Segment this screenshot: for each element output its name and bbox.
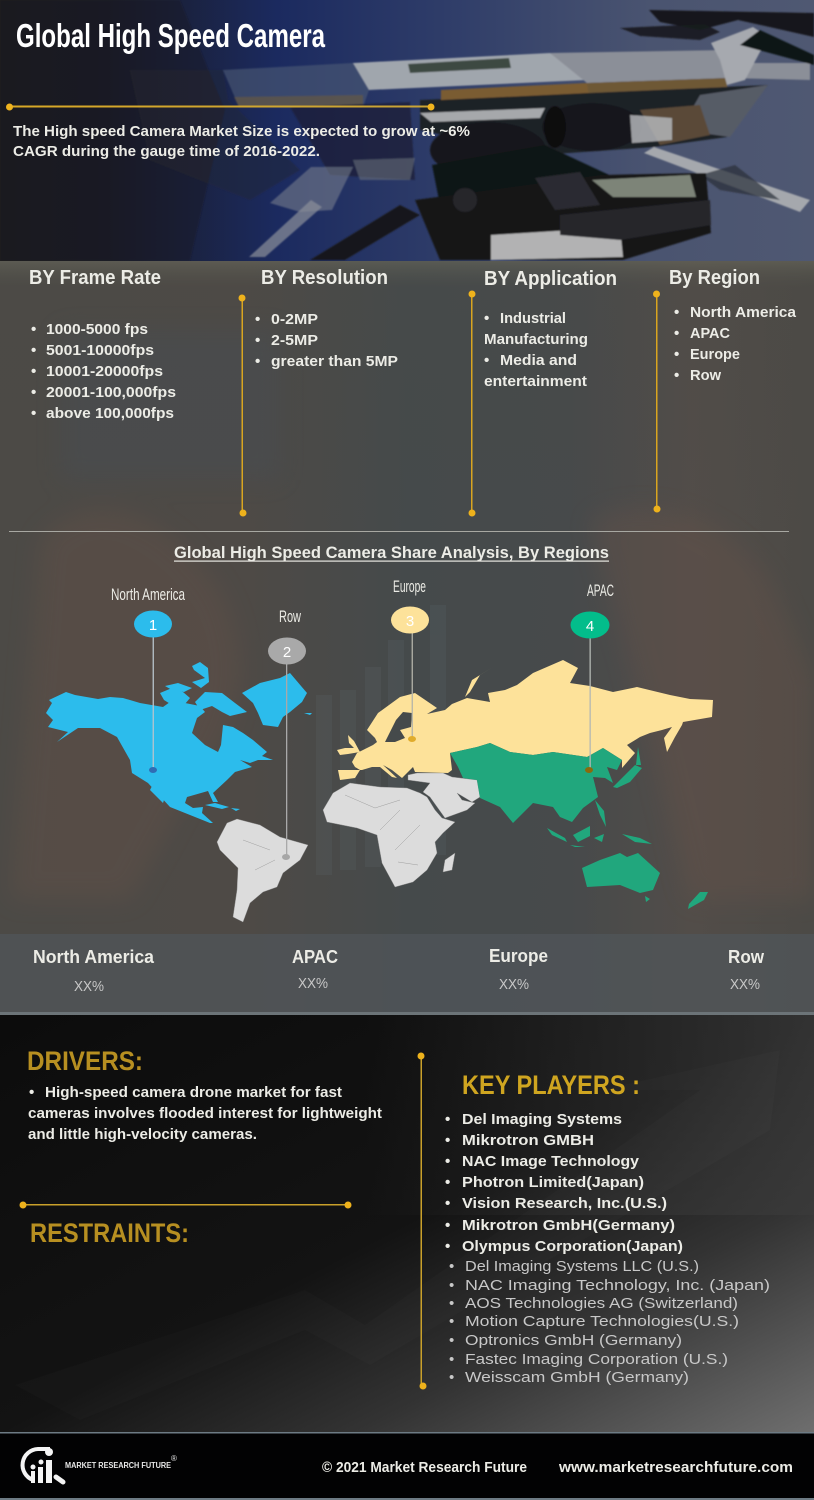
pin: North America bbox=[111, 585, 185, 773]
connector: key players bbox=[418, 1052, 426, 1390]
pin: North America: 1 bbox=[149, 617, 157, 634]
column: frame rate: • bbox=[31, 405, 36, 422]
list: key players: • bbox=[449, 1369, 454, 1386]
stat: Row bbox=[728, 947, 765, 993]
list: key players: • bbox=[445, 1132, 450, 1149]
pin: North America: North America bbox=[111, 585, 185, 604]
heading: drivers: DRIVERS: bbox=[27, 1046, 143, 1076]
column: frame rate: • bbox=[31, 321, 36, 338]
region: Row bbox=[217, 773, 480, 922]
column: frame rate: 5001-10000fps bbox=[46, 342, 154, 359]
text: intro: The High speed Camera Market Size is expected to grow at ~6% bbox=[13, 123, 470, 140]
text: drivers: cameras involves flooded interest for lightweight bbox=[28, 1105, 382, 1122]
column: resolution: greater than 5MP bbox=[271, 353, 398, 370]
list: key players: • bbox=[445, 1238, 450, 1255]
column: frame rate bbox=[29, 267, 176, 422]
divider: drivers and restraints bbox=[20, 1202, 352, 1208]
list: key players bbox=[445, 1111, 770, 1386]
list: key players: Fastec Imaging Corporation (U.S.) bbox=[465, 1351, 728, 1368]
text: website: www.marketresearchfuture.com bbox=[558, 1459, 793, 1476]
heading: key players: KEY PLAYERS : bbox=[462, 1070, 640, 1100]
title: Global High Speed Camera bbox=[16, 17, 325, 54]
connector: resolution bbox=[238, 294, 246, 516]
list: key players: • bbox=[445, 1111, 450, 1128]
column: application bbox=[484, 268, 617, 390]
column: application: Media and bbox=[500, 352, 577, 369]
text: copyright: © 2021 Market Research Future bbox=[322, 1459, 527, 1476]
list: key players: NAC Image Technology bbox=[462, 1153, 640, 1170]
connector: region bbox=[653, 290, 660, 512]
text: drivers: and little high-velocity cameras. bbox=[28, 1126, 257, 1143]
column: application: Industrial bbox=[500, 310, 566, 327]
column: region: • bbox=[674, 367, 679, 384]
list: key players: Del Imaging Systems bbox=[462, 1111, 622, 1128]
column: frame rate: 20001-100,000fps bbox=[46, 384, 176, 401]
column: region: Row bbox=[690, 367, 721, 384]
column: frame rate: • bbox=[31, 384, 36, 401]
list: key players: • bbox=[449, 1313, 454, 1330]
stat: North America: XX% bbox=[74, 978, 104, 995]
column: frame rate: above 100,000fps bbox=[46, 405, 174, 422]
list: key players: • bbox=[445, 1195, 450, 1212]
column: application: • bbox=[484, 352, 489, 369]
list: key players: Weisscam GmbH (Germany) bbox=[465, 1369, 689, 1386]
world map bbox=[46, 660, 713, 922]
stat: Europe: Europe bbox=[489, 946, 548, 966]
list: key players: • bbox=[445, 1153, 450, 1170]
list: key players: Del Imaging Systems LLC (U.S.) bbox=[465, 1258, 699, 1275]
stat: APAC: XX% bbox=[298, 975, 328, 992]
column: frame rate: 1000-5000 fps bbox=[46, 321, 148, 338]
panel: hero header bbox=[0, 0, 814, 261]
column: resolution: • bbox=[255, 311, 260, 328]
column: region: • bbox=[674, 304, 679, 321]
column: application: • bbox=[484, 310, 489, 327]
column: region: APAC bbox=[690, 325, 730, 342]
list: key players: Olympus Corporation(Japan) bbox=[462, 1238, 683, 1255]
image: camera rig bbox=[0, 0, 814, 261]
column: frame rate: BY Frame Rate bbox=[29, 267, 161, 289]
list: key players: Mikrotron GMBH bbox=[462, 1132, 594, 1149]
divider: gold line with dots bbox=[6, 104, 434, 110]
stat: North America bbox=[33, 947, 155, 995]
region: North America bbox=[46, 662, 312, 823]
sea: Baltic bbox=[385, 712, 412, 742]
column: resolution: • bbox=[255, 332, 260, 349]
list: key players: Optronics GmbH (Germany) bbox=[465, 1332, 682, 1349]
list: key players: • bbox=[449, 1258, 454, 1275]
pin: APAC bbox=[570, 581, 614, 773]
list: key players: Mikrotron GmbH(Germany) bbox=[462, 1217, 675, 1234]
column: resolution: BY Resolution bbox=[261, 267, 388, 289]
stat: Europe bbox=[489, 946, 548, 993]
panel: regional shares bbox=[0, 934, 814, 1015]
text: brand: ® bbox=[171, 1454, 177, 1463]
text: intro: CAGR during the gauge time of 2016-2022. bbox=[13, 143, 320, 160]
region: Europe bbox=[337, 660, 713, 780]
section: segment columns bbox=[29, 267, 797, 516]
column: application: entertainment bbox=[484, 373, 587, 390]
column: resolution: 2-5MP bbox=[271, 332, 318, 349]
text: drivers: High-speed camera drone market for fast bbox=[45, 1084, 342, 1101]
pin: Europe: Europe bbox=[393, 577, 426, 596]
list: key players: • bbox=[449, 1277, 454, 1294]
heading: restraints: RESTRAINTS: bbox=[30, 1218, 189, 1248]
footer bbox=[0, 1432, 814, 1500]
stat: APAC bbox=[292, 947, 338, 992]
stat: Row: Row bbox=[728, 947, 765, 967]
stat: North America: North America bbox=[33, 947, 155, 967]
pin: APAC: 4 bbox=[586, 618, 594, 635]
column: frame rate: 10001-20000fps bbox=[46, 363, 163, 380]
column: frame rate: • bbox=[31, 363, 36, 380]
column: application: BY Application bbox=[484, 268, 617, 290]
column: region: North America bbox=[690, 304, 797, 321]
list: key players: • bbox=[445, 1217, 450, 1234]
column: region: • bbox=[674, 325, 679, 342]
stat: Row: XX% bbox=[730, 976, 760, 993]
text: drivers bbox=[28, 1084, 382, 1143]
pin: Row bbox=[268, 607, 306, 860]
list: key players: • bbox=[445, 1174, 450, 1191]
column: resolution: 0-2MP bbox=[271, 311, 318, 328]
list: key players: Vision Research, Inc.(U.S.) bbox=[462, 1195, 667, 1212]
icon: logo bbox=[23, 1448, 63, 1483]
text: drivers: • bbox=[29, 1084, 34, 1101]
connector: application bbox=[468, 290, 476, 516]
pin: Row: Row bbox=[279, 607, 301, 626]
list: key players: Photron Limited(Japan) bbox=[462, 1174, 644, 1191]
column: region: • bbox=[674, 346, 679, 363]
column: resolution bbox=[255, 267, 398, 370]
text: brand: MARKET RESEARCH FUTURE bbox=[65, 1461, 172, 1470]
pin: Europe: 3 bbox=[406, 613, 414, 630]
column: resolution: • bbox=[255, 353, 260, 370]
column: region: Europe bbox=[690, 346, 740, 363]
text: brand bbox=[65, 1454, 177, 1470]
column: region bbox=[669, 267, 797, 384]
panel: middle background bbox=[0, 261, 814, 1015]
pin: APAC: APAC bbox=[587, 581, 614, 600]
column: application: Manufacturing bbox=[484, 331, 588, 348]
list: key players: • bbox=[449, 1351, 454, 1368]
list: key players: • bbox=[449, 1332, 454, 1349]
panel: lower dark section bbox=[0, 1015, 814, 1432]
heading: share analysis: Global High Speed Camera Share Analysis, By Regions bbox=[174, 544, 609, 562]
stat: APAC: APAC bbox=[292, 947, 338, 967]
stat: Europe: XX% bbox=[499, 976, 529, 993]
list: key players: Motion Capture Technologies(U.S.) bbox=[465, 1313, 739, 1330]
column: frame rate: • bbox=[31, 342, 36, 359]
list: key players: • bbox=[449, 1295, 454, 1312]
pin: Row: 2 bbox=[283, 644, 291, 661]
list: key players: NAC Imaging Technology, Inc. (Japan) bbox=[465, 1277, 770, 1294]
list: key players: AOS Technologies AG (Switzerland) bbox=[465, 1295, 738, 1312]
column: region: By Region bbox=[669, 267, 760, 289]
pin: Europe bbox=[391, 577, 429, 742]
region: APAC bbox=[450, 743, 708, 909]
text: intro bbox=[13, 123, 470, 160]
